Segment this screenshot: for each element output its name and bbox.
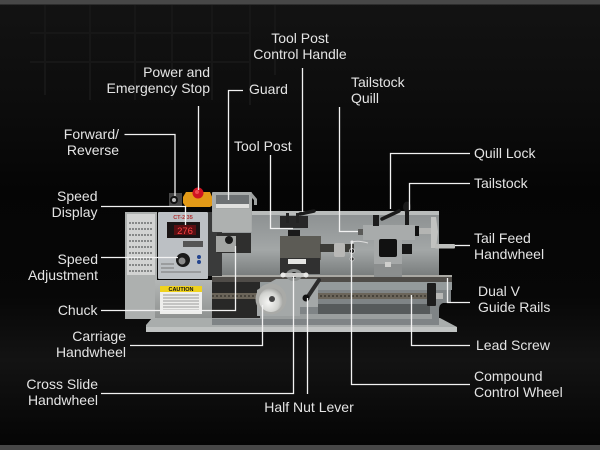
tailstock — [358, 225, 415, 277]
tail feed handwheel — [415, 217, 455, 248]
label: tailstock: Tailstock — [474, 175, 529, 191]
label: tail feed handwheel: Handwheel — [474, 246, 544, 262]
label: dual v guide rails: Dual V — [478, 283, 520, 299]
label: speed adjustment: Speed — [58, 251, 98, 267]
tool post — [280, 211, 314, 236]
carriage — [257, 236, 354, 316]
carriage handwheel — [256, 284, 286, 314]
quill lock knob — [403, 202, 411, 225]
label: power and emergency stop: Power and — [143, 64, 210, 80]
label: tool post: Tool Post — [234, 138, 292, 154]
label: cross slide handwheel: Cross Slide — [26, 376, 98, 392]
cross slide handwheel — [280, 269, 308, 281]
label: speed adjustment: Adjustment — [28, 267, 98, 283]
label: carriage handwheel: Carriage — [72, 328, 126, 344]
label: compound control wheel: Compound — [474, 368, 542, 384]
label: chuck: Chuck — [58, 302, 98, 318]
label: cross slide handwheel: Handwheel — [28, 392, 98, 408]
label: forward reverse: Forward/ — [64, 126, 119, 142]
label: speed display: Speed — [57, 188, 98, 204]
headstock — [208, 212, 222, 276]
label: power and emergency stop: Emergency Stop — [106, 80, 210, 96]
chuck — [216, 233, 251, 253]
speed display digits: 276 — [177, 226, 193, 237]
lathe base — [146, 318, 457, 332]
compound control wheel — [350, 240, 368, 261]
label: tool post control handle: Control Handle — [253, 46, 347, 62]
label: tailstock quill: Quill — [351, 90, 379, 106]
control panel — [158, 212, 208, 279]
lower cabinet with caution label: CAUTION — [168, 287, 194, 293]
lead screw — [212, 293, 430, 299]
label: carriage handwheel: Handwheel — [56, 344, 126, 360]
label: lead screw: Lead Screw — [476, 337, 551, 353]
control panel: CT-2 35 — [173, 215, 193, 221]
guide rails — [212, 275, 452, 282]
label: speed display: Display — [52, 204, 98, 220]
forward reverse switch — [169, 193, 182, 206]
label: tailstock quill: Tailstock — [351, 74, 405, 90]
label: quill lock: Quill Lock — [474, 145, 536, 161]
label: tail feed handwheel: Tail Feed — [474, 230, 531, 246]
lower cabinet with caution label — [155, 280, 212, 318]
label: guard: Guard — [249, 81, 288, 97]
speed knob — [176, 253, 190, 267]
guard — [212, 192, 257, 232]
dark gap between cabinet and apron — [212, 282, 260, 318]
tailstock lock lever — [382, 211, 399, 219]
left info plate — [125, 212, 157, 319]
lathe machine — [125, 188, 457, 332]
label: half nut lever: Half Nut Lever — [264, 399, 354, 415]
half nut lever — [302, 280, 319, 302]
label: dual v guide rails: Guide Rails — [478, 299, 550, 315]
label: forward reverse: Reverse — [67, 142, 119, 158]
leader lines — [101, 68, 470, 394]
lathe bed lower casting — [212, 282, 451, 325]
label: tool post control handle: Tool Post — [271, 30, 329, 46]
emergency stop — [183, 188, 213, 207]
label: compound control wheel: Control Wheel — [474, 384, 563, 400]
lathe bed back panel — [220, 211, 439, 276]
